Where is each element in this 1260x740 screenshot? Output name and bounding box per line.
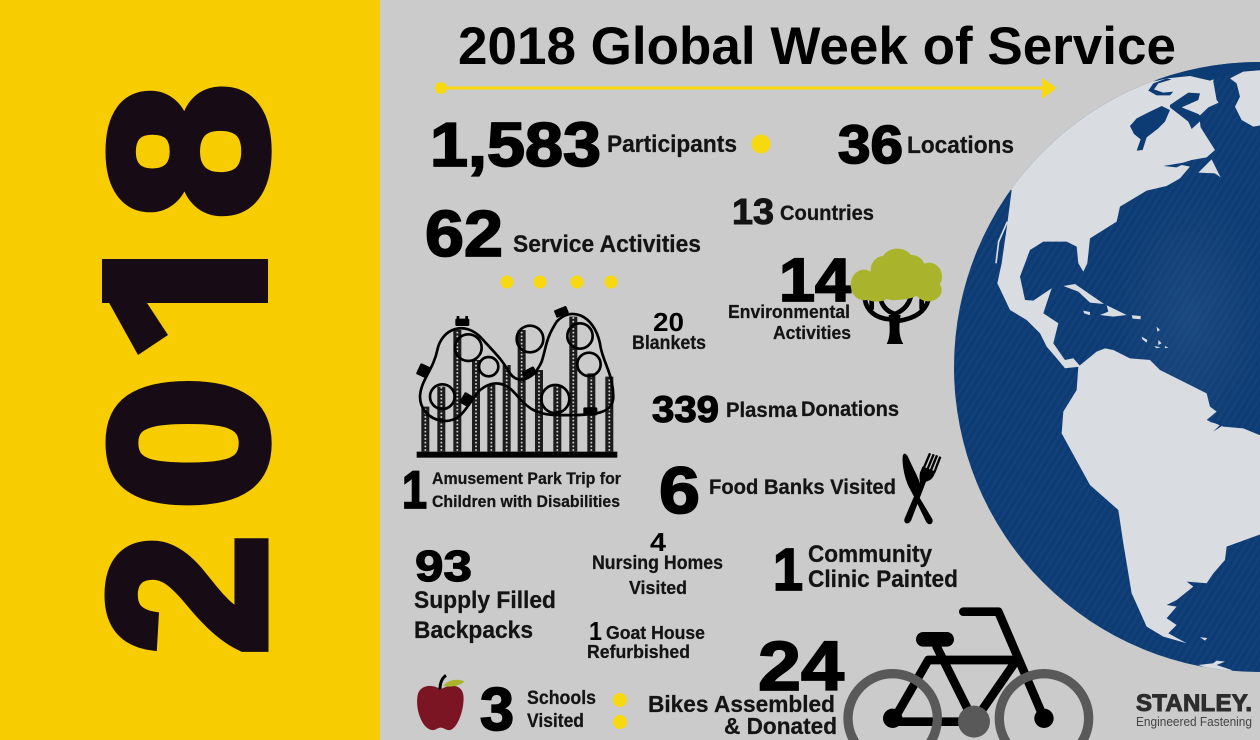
stat: bikes: 24: [758, 627, 844, 705]
stat: schools: [480, 676, 596, 740]
dot: [752, 134, 770, 154]
panel: yellow year band: [0, 0, 380, 740]
stat: plasma donations: Donations: [801, 398, 899, 421]
South America: [1062, 348, 1260, 675]
icon: tree: [851, 249, 942, 344]
stat: plasma donations: [652, 389, 899, 430]
stat: amusement park trip: Children with Disabilities: [432, 492, 620, 511]
Cuba and Caribbean: [1063, 284, 1168, 348]
stat: blankets: [632, 307, 706, 354]
stat: schools: Schools: [527, 688, 596, 709]
globe: [954, 57, 1260, 675]
stat: countries: Countries: [780, 202, 874, 225]
stat: food banks: 6: [659, 453, 700, 527]
stat: food banks: [659, 453, 896, 527]
icon: roller coaster: [416, 306, 617, 458]
stat: nursing homes: 4: [650, 527, 667, 557]
stat: schools: Visited: [527, 711, 584, 732]
stat: supply backpacks: Supply Filled: [414, 587, 556, 614]
stat: environmental activities: Activities: [773, 323, 851, 343]
stat: supply backpacks: Backpacks: [414, 617, 533, 644]
stat: locations: Locations: [907, 132, 1014, 159]
stat: participants: Participants: [607, 131, 737, 158]
Hudson Bay and northern waters: [1130, 62, 1258, 151]
icon: fork and knife: [903, 453, 940, 524]
stat: bikes: [648, 627, 844, 739]
stat: amusement park trip: 1: [402, 461, 427, 520]
stat: food banks: Food Banks Visited: [709, 476, 896, 499]
stat: bikes: Bikes Assembled: [648, 691, 835, 717]
stat: participants: [430, 111, 737, 180]
stat: goat house: 1: [589, 616, 602, 646]
stat: locations: [838, 115, 1014, 175]
stat: blankets: Blankets: [632, 333, 706, 354]
stat: community clinic: Community: [808, 541, 933, 568]
stat: community clinic: 1: [773, 537, 803, 603]
stat: environmental activities: Environmental: [728, 302, 850, 322]
stat: nursing homes: Visited: [629, 578, 687, 598]
stat: nursing homes: Nursing Homes: [592, 553, 723, 574]
dots row: [500, 276, 618, 288]
stat: service activities: Service Activities: [513, 231, 701, 258]
stat: amusement park trip: Amusement Park Trip for: [432, 469, 621, 488]
stat: amusement park trip: [402, 461, 621, 520]
stat: plasma donations: Plasma: [726, 399, 797, 422]
logo: Stanley: STANLEY.: [1136, 690, 1252, 717]
stat: nursing homes: [592, 527, 723, 598]
stat: countries: [732, 191, 874, 232]
stat: supply backpacks: 93: [415, 542, 472, 591]
stat: goat house: [587, 616, 705, 662]
Baja sliver: [996, 222, 1007, 263]
icon: bicycle: [848, 612, 1089, 740]
stat: plasma donations: 339: [652, 389, 719, 430]
dots pair: [613, 693, 627, 729]
Greenland: [1230, 70, 1260, 127]
stat: supply backpacks: [414, 542, 556, 644]
Newfoundland: [1198, 159, 1221, 177]
year 2018: [102, 86, 272, 652]
stat: blankets: 20: [653, 307, 684, 337]
stat: bikes: & Donated: [724, 713, 837, 739]
stat: environmental activities: [728, 246, 851, 343]
icon: apple: [417, 675, 464, 730]
stat: goat house: Refurbished: [587, 641, 690, 662]
stat: participants: 1,583: [430, 111, 601, 180]
North America: [983, 60, 1219, 368]
stat: goat house: Goat House: [606, 622, 705, 643]
stat: locations: 36: [838, 115, 903, 175]
stat: service activities: 62: [425, 197, 503, 270]
year 2018: 0: [65, 376, 313, 510]
year 2018: 1: [53, 224, 316, 355]
title: 2018 Global Week of Service: [458, 17, 1176, 76]
year 2018: 2: [64, 534, 312, 655]
stat: service activities: [425, 197, 701, 270]
year 2018: 8: [65, 84, 313, 219]
stat: community clinic: Clinic Painted: [808, 566, 958, 593]
logo: Stanley: Engineered Fastening: [1136, 715, 1252, 729]
stat: environmental activities: 14: [779, 246, 851, 314]
arrow: timeline: [435, 78, 1057, 99]
stat: community clinic: [773, 537, 958, 603]
logo: Stanley: [1136, 690, 1252, 729]
stat: countries: 13: [732, 191, 774, 232]
